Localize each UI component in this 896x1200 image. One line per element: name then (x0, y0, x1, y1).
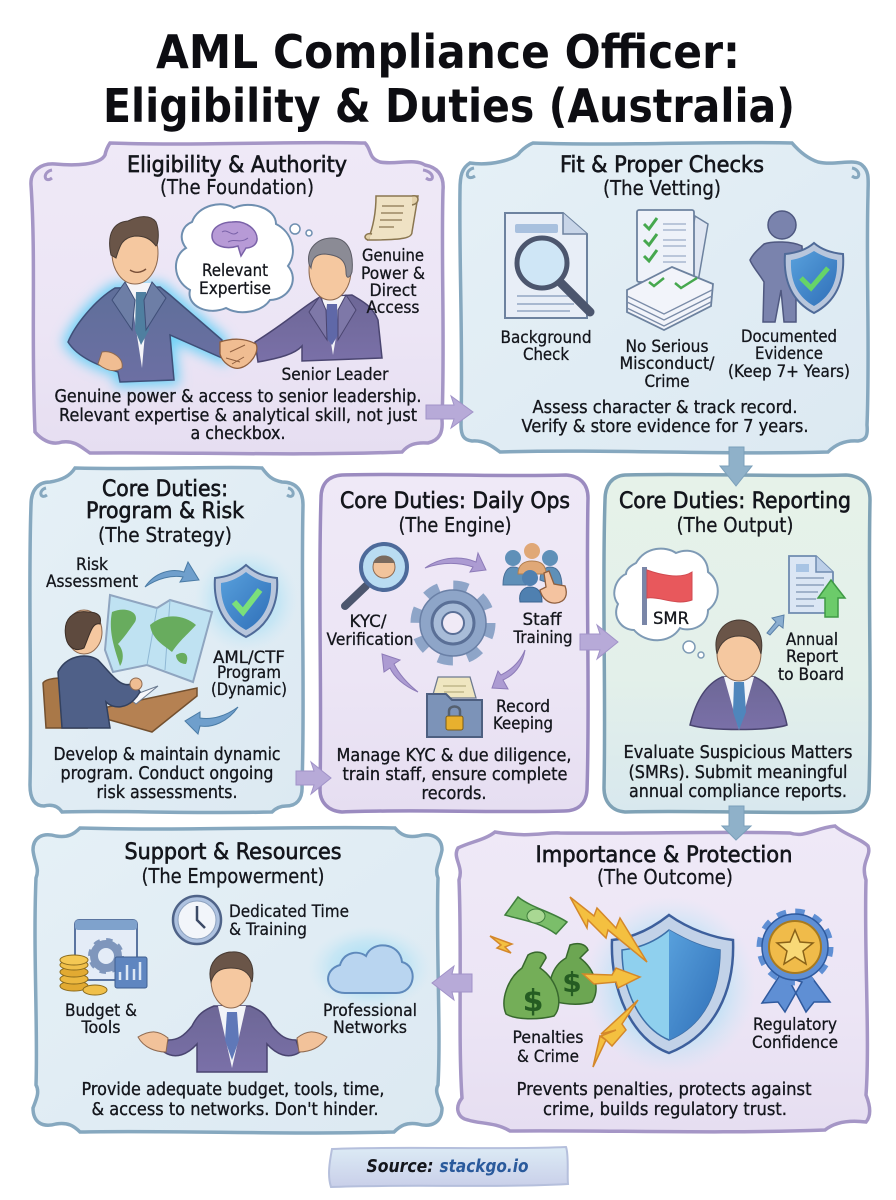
label: background check (500, 328, 592, 365)
heading: (The Engine) (398, 513, 512, 537)
heading (536, 843, 792, 889)
icon: brain (212, 222, 257, 256)
label: regulatory confidence: Regulatory (753, 1015, 837, 1035)
body text (54, 386, 422, 444)
illustration: man at desk (43, 610, 142, 728)
icon: report with up arrow (789, 556, 845, 617)
label: no serious misconduct: Misconduct/ (620, 354, 715, 374)
arrow: officer to report (767, 615, 784, 635)
body text: Relevant expertise & analytical skill, not just (59, 405, 417, 426)
heading: Core Duties: Reporting (619, 489, 851, 514)
heading (124, 840, 342, 888)
label: genuine power: Direct (370, 281, 417, 301)
body text: crime, builds regulatory trust. (543, 1099, 787, 1120)
heading: Eligibility & Authority (127, 153, 347, 178)
heading: (The Outcome) (597, 865, 733, 889)
body text: program. Conduct ongoing (60, 763, 274, 784)
illustration: map and desk (103, 595, 212, 732)
heading (560, 153, 764, 200)
panel: fit and proper checks (460, 143, 868, 453)
label: AML/CTF program: AML/CTF (213, 648, 285, 668)
body text: Evaluate Suspicious Matters (624, 742, 852, 763)
label: background check: Background (500, 328, 592, 348)
icon: money bags: $ (562, 966, 582, 999)
body text: Develop & maintain dynamic (54, 744, 280, 765)
body text: Provide adequate budget, tools, time, (82, 1079, 384, 1100)
label: annual report (778, 630, 844, 685)
label: staff training (513, 610, 572, 648)
body text (54, 744, 280, 803)
label: penalties and crime: Penalties (512, 1028, 584, 1048)
source badge: stackgo.io (440, 1156, 528, 1177)
label: genuine power: Genuine (362, 246, 424, 266)
label: no serious misconduct: No Serious (626, 337, 709, 357)
icon: money bags (504, 944, 596, 1019)
label: risk assessment (46, 555, 138, 592)
thought bubble with brain: Expertise (199, 279, 271, 299)
icon: locked folder (427, 677, 482, 737)
illustration: officer (690, 620, 787, 730)
label: annual report: to Board (778, 665, 844, 685)
body text (516, 1079, 812, 1120)
heading: Importance & Protection (536, 843, 792, 868)
body text (82, 1079, 384, 1120)
arrow: records to KYC (382, 654, 418, 692)
arrow: risk to shield (145, 562, 199, 587)
label: genuine power: Power & (361, 264, 425, 284)
label: professional networks: Professional (323, 1001, 417, 1021)
icon: document with magnifier (505, 213, 590, 318)
label: documented evidence: (Keep 7+ Years) (728, 362, 850, 382)
label: documented evidence: Evidence (755, 344, 823, 364)
label: regulatory confidence: Confidence (752, 1033, 838, 1053)
title: AML Compliance Officer: (156, 25, 740, 79)
illustration: manager with open hands (138, 952, 327, 1072)
label: documented evidence: Documented (741, 327, 837, 347)
source badge (329, 1147, 568, 1187)
label: documented evidence (728, 327, 850, 382)
heading: Program & Risk (86, 499, 244, 524)
icon: glowing shield with check (194, 548, 298, 652)
body text: Assess character & track record. (532, 397, 798, 418)
body text: Manage KYC & due diligence, (336, 745, 572, 766)
arrow: program back (185, 707, 238, 734)
heading (86, 477, 244, 547)
arrow: reporting to importance (722, 806, 751, 840)
label: dedicated time: Dedicated Time (229, 902, 349, 922)
body text: risk assessments. (96, 782, 238, 803)
label: KYC verification (326, 612, 414, 650)
arrow: eligibility to fit (426, 396, 473, 428)
panel: core duties reporting (604, 474, 870, 813)
label: record keeping: Keeping (493, 714, 553, 734)
icon: clock (173, 896, 221, 944)
label: annual report: Report (786, 647, 838, 667)
label: staff training: Training (513, 628, 572, 648)
label: dedicated time: & Training (229, 920, 307, 940)
arrow: importance to support (432, 966, 472, 1000)
heading (340, 489, 570, 537)
body text: annual compliance reports. (629, 781, 847, 802)
label: record keeping: Record (496, 697, 550, 717)
icon: person with shield (750, 211, 843, 322)
icon: gold star ribbon badge (761, 913, 830, 1012)
arrow: staff to records (492, 650, 525, 689)
arrow: program to daily ops (296, 762, 331, 794)
icon: checklist and paper stack (627, 210, 713, 330)
label: no serious misconduct: Crime (644, 372, 690, 392)
panel: core duties program and risk (30, 467, 303, 813)
heading: (The Output) (676, 513, 794, 537)
title: Eligibility & Duties (Australia) (103, 79, 795, 133)
thought bubble with flag (614, 549, 718, 658)
label: genuine power (361, 246, 425, 318)
label: record keeping (493, 697, 553, 734)
panel: core duties daily ops (320, 474, 588, 812)
thought bubble with brain (176, 204, 312, 312)
body text: Genuine power & access to senior leadership. (54, 386, 422, 407)
illustration: senior leader (255, 238, 382, 362)
label: risk assessment: Assessment (46, 572, 138, 592)
thought bubble with brain: Relevant (202, 261, 268, 281)
body text: Prevents penalties, protects against (516, 1079, 812, 1100)
icon: budget tools (60, 920, 147, 995)
label: no serious misconduct (620, 337, 715, 392)
heading: (The Empowerment) (142, 864, 324, 888)
body text: a checkbox. (190, 423, 286, 444)
label: senior leader: Senior Leader (282, 365, 388, 385)
icon: red flag (642, 567, 692, 625)
label: professional networks (323, 1001, 417, 1038)
heading (127, 153, 347, 199)
label: budget: Tools (81, 1018, 121, 1038)
title (103, 25, 795, 133)
arrow: fit to reporting (720, 447, 752, 486)
label: KYC verification: KYC/ (350, 612, 387, 632)
body text: Verify & store evidence for 7 years. (522, 416, 808, 437)
source badge: Source: (366, 1156, 434, 1177)
heading (619, 489, 851, 537)
body text: records. (422, 783, 486, 804)
arrow: KYC to staff (425, 553, 486, 572)
thought bubble with flag: SMR (653, 609, 689, 629)
icon: cloud (308, 926, 432, 1010)
label: penalties and crime: & Crime (517, 1047, 579, 1067)
body text: & access to networks. Don't hinder. (92, 1099, 378, 1120)
label: staff training: Staff (522, 610, 563, 630)
panel: importance and protection (456, 826, 870, 1132)
label: AML/CTF program: (Dynamic) (211, 680, 287, 700)
icon: lightning bolts (490, 897, 647, 1067)
label: dedicated time (229, 902, 349, 940)
heading: Core Duties: (102, 477, 228, 502)
label: budget: Budget & (65, 1001, 137, 1021)
label: AML/CTF program (211, 648, 287, 700)
icon: scroll (365, 196, 418, 240)
body text (336, 745, 572, 804)
panel: eligibility and authority (31, 143, 443, 454)
heading: Core Duties: Daily Ops (340, 489, 570, 514)
heading: (The Strategy) (98, 523, 232, 547)
label: genuine power: Access (366, 298, 420, 318)
label: regulatory confidence (752, 1015, 838, 1053)
icon: KYC magnifier (345, 544, 407, 606)
label: penalties and crime (512, 1028, 584, 1067)
heading: (The Foundation) (160, 175, 314, 199)
body text (624, 742, 852, 802)
label: annual report: Annual (786, 630, 838, 650)
icon: banknote (505, 897, 567, 934)
heading: Support & Resources (124, 840, 342, 865)
icon: handshake (220, 339, 257, 368)
label: budget (65, 1001, 137, 1038)
heading: Fit & Proper Checks (560, 153, 764, 178)
body text: train staff, ensure complete (342, 764, 568, 785)
icon: money bags: $ (523, 984, 543, 1019)
body text: (SMRs). Submit meaningful (628, 762, 848, 783)
arrow: daily ops to reporting (580, 625, 618, 659)
heading: (The Vetting) (603, 176, 721, 200)
label: risk assessment: Risk (76, 555, 108, 575)
icon: staff group and hand (503, 543, 566, 603)
icon: gear (416, 586, 490, 660)
icon: glowing shield (584, 897, 756, 1073)
body text (522, 397, 808, 437)
panel: support and resources (33, 828, 442, 1133)
illustration: candidate with glow (68, 217, 222, 382)
label: background check: Check (523, 345, 569, 365)
label: KYC verification: Verification (326, 630, 414, 650)
label: AML/CTF program: Program (217, 663, 281, 683)
label: professional networks: Networks (333, 1018, 407, 1038)
